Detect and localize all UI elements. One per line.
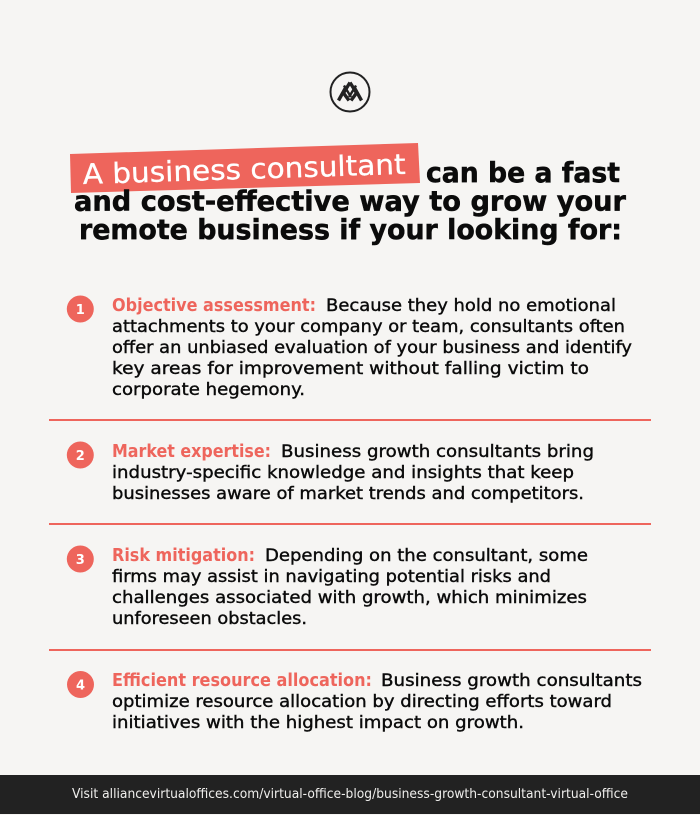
item 1: objective assessment: key areas for improvement without falling victim to: [112, 359, 589, 379]
number badge 4: 4: [76, 678, 85, 694]
item 1: objective assessment: attachments to your company or team, consultants often: [112, 317, 625, 337]
item 2: market expertise: [67, 442, 594, 504]
number badge 1: [67, 296, 94, 322]
item 3: risk mitigation: firms may assist in navigating potential risks and: [112, 567, 551, 587]
heading: remote business if your looking for:: [79, 214, 622, 246]
item 1: objective assessment: corporate hegemony.: [112, 380, 305, 400]
item 3: risk mitigation: Risk mitigation:: [112, 546, 255, 566]
item 3: risk mitigation: unforeseen obstacles.: [112, 609, 307, 629]
heading: and cost-effective way to grow your: [74, 186, 626, 218]
heading: [70, 143, 626, 246]
item 1: objective assessment: offer an unbiased evaluation of your business and identify: [112, 338, 632, 358]
item 3: risk mitigation: challenges associated with growth, which minimizes: [112, 588, 587, 608]
heading highlight: A business consultant: [82, 148, 406, 191]
number badge 3: [67, 546, 94, 572]
heading: can be a fast: [426, 157, 620, 189]
item 1: objective assessment: Objective assessment:: [112, 296, 316, 316]
number badge 3: 3: [76, 553, 85, 568]
number badge 2: 2: [76, 449, 85, 464]
number badge 2: [67, 442, 94, 468]
item 1: objective assessment: Because they hold no emotional: [326, 296, 616, 316]
item 4: efficient resource allocation: [67, 671, 642, 733]
number badge 1: 1: [76, 303, 85, 318]
item 4: efficient resource allocation: Efficient resource allocation:: [112, 671, 372, 691]
icon: logo: [330, 72, 370, 112]
number badge 4: [67, 671, 94, 698]
item 4: efficient resource allocation: optimize resource allocation by directing efforts toward: [112, 692, 612, 712]
item 2: market expertise: industry-specific knowledge and insights that keep: [112, 463, 574, 483]
item 2: market expertise: Business growth consultants bring: [281, 442, 594, 462]
footer bar: [0, 775, 700, 814]
footer bar: Visit alliancevirtualoffices.com/virtual-office-blog/business-growth-consultant-virtual-office: [72, 787, 628, 802]
item 3: risk mitigation: [67, 546, 588, 629]
item 4: efficient resource allocation: Business growth consultants: [381, 671, 642, 691]
item 2: market expertise: businesses aware of market trends and competitors.: [112, 484, 584, 504]
item 2: market expertise: Market expertise:: [112, 442, 271, 462]
item 4: efficient resource allocation: initiatives with the highest impact on growth.: [112, 713, 524, 733]
item 1: objective assessment: [67, 296, 632, 400]
item 3: risk mitigation: Depending on the consultant, some: [265, 546, 588, 566]
